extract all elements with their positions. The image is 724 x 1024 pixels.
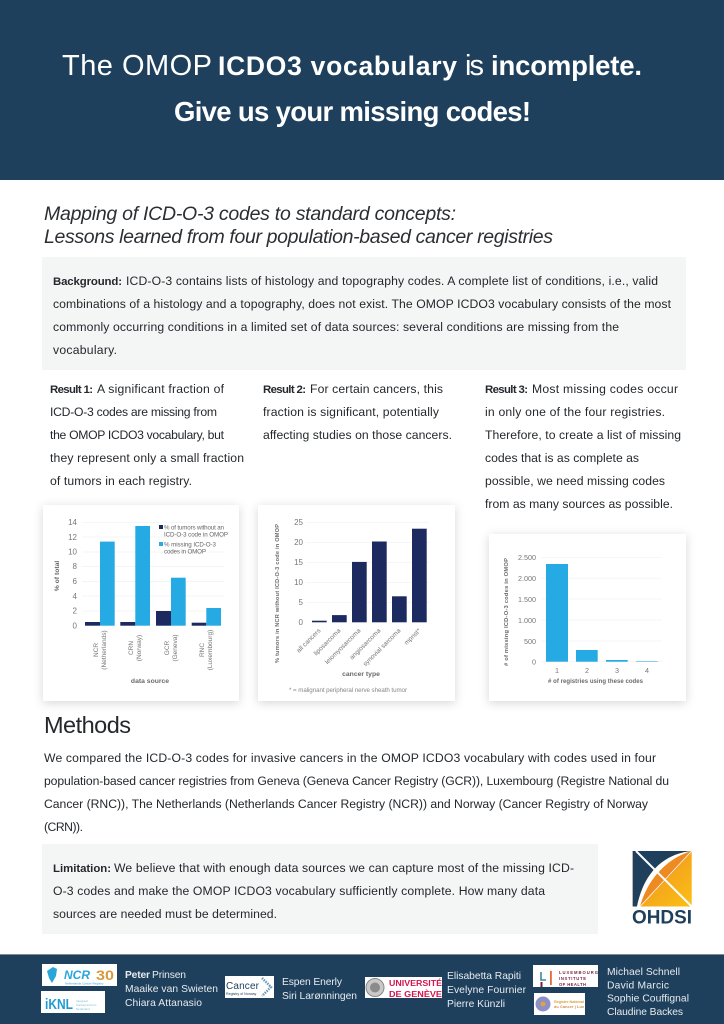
text: result 3 [485, 382, 681, 511]
chart: percentage by cancer type: liposarcoma [313, 627, 343, 657]
chart: percentage by cancer type [258, 505, 455, 701]
title: ICDO3 vocabulary [218, 51, 457, 81]
panel: background [42, 257, 686, 370]
chart: percentage by data source: (Norway) [136, 635, 143, 661]
text: result 2: For certain cancers, this [310, 382, 443, 396]
chart: missing codes by number of registries: 1 [555, 666, 559, 675]
logo: NCR: 30 [96, 967, 114, 983]
chart: percentage by cancer type: * = malignant peripheral nerve sheath tumor [289, 687, 407, 694]
logo: Registre National du Cancer: du Cancer | Lux [554, 1005, 585, 1009]
chart: missing codes by number of registries: 2.500 [518, 553, 536, 562]
logo: NCR: Netherlands Cancer Registry [65, 982, 104, 986]
text: result 2 [263, 382, 452, 442]
authors: RNC and LIH: Sophie Couffignal [607, 994, 689, 1004]
panel: limitation: sources are needed must be determined. [53, 907, 277, 921]
chart: percentage by data source: data source [131, 678, 169, 685]
chart: percentage by data source: 12 [68, 533, 78, 542]
text: result 1: of tumors in each registry. [50, 474, 192, 488]
chart: percentage by cancer type: cancer type [342, 671, 380, 678]
legend: % missing ICD-O-3 [164, 542, 217, 548]
title [62, 50, 642, 127]
logo: Cancer Registry of Norway: Registry of Norway [226, 992, 257, 996]
chart: percentage by cancer type: % tumors in NCR without ICD-O-3 code in OMOP [275, 524, 281, 663]
logo: KNL: Kankercentrum [76, 1003, 97, 1007]
authors: CRN: Siri Larønningen [282, 991, 357, 1002]
subtitle [44, 203, 553, 248]
chart: percentage by cancer type: 0 [299, 618, 304, 627]
panel: background: Background: [53, 276, 122, 288]
text: result 3: from as many sources as possible. [485, 497, 673, 511]
text: methods: We compared the ICD-O-3 codes for invasive cancers in the OMOP ICDO3 vocabulary with codes used in four [44, 751, 656, 765]
text: methods [44, 751, 669, 834]
authors: GCR: Evelyne Fournier [447, 985, 527, 996]
panel: background: commonly occurring conditions in a limited set of data sources: several conditions are missing from the [53, 320, 619, 334]
title: incomplete. [491, 50, 642, 81]
panel: background: vocabulary. [53, 343, 117, 357]
panel: limitation: Limitation: [53, 863, 111, 875]
chart: missing codes by number of registries: 2.000 [518, 574, 536, 583]
chart: percentage by data source: 0 [73, 622, 78, 630]
logo: Cancer Registry of Norway [225, 976, 274, 998]
logo: Université de Genève: DE GENÈVE [389, 989, 442, 999]
chart: percentage by data source: GCR [164, 640, 171, 655]
chart: percentage by cancer type: synovial sarcoma [362, 627, 403, 668]
chart: missing codes by number of registries: # of missing ICD-O-3 codes in OMOP [504, 558, 510, 666]
legend: codes in OMOP [164, 548, 206, 556]
text: result 1 [50, 382, 244, 488]
text: result 1: Result 1: [50, 384, 93, 396]
chart: missing codes by number of registries: 1.500 [518, 595, 536, 604]
chart: missing codes by number of registries: 0 [532, 658, 536, 666]
chart: percentage by cancer type: all cancers [295, 627, 323, 654]
panel: limitation: We believe that with enough data sources we can capture most of the missing ICD- [114, 861, 574, 875]
subtitle: Mapping of ICD-O-3 codes to standard concepts: [44, 203, 456, 225]
authors: RNC and LIH: Michael Schnell [607, 967, 680, 978]
chart: percentage by data source: % of total [54, 561, 61, 591]
chart: missing codes by number of registries: 3 [615, 666, 619, 675]
text: result 3: codes that is as complete as [485, 451, 639, 465]
logo: KNL [41, 991, 105, 1013]
text: result 2: Result 2: [263, 384, 306, 396]
chart: percentage by data source: (Geneva) [172, 634, 179, 662]
legend: ICD-O-3 code in OMOP [164, 532, 228, 538]
authors: CRN [282, 977, 357, 1002]
chart: percentage by data source: CRN [128, 641, 135, 655]
icon: OHDSI logo [632, 851, 692, 928]
logo: NCR [42, 964, 117, 986]
authors: NCR [125, 970, 218, 1009]
icon: OHDSI logo: OHDSI [632, 906, 692, 928]
text: result 3: in only one of the four registries. [485, 405, 665, 419]
text: methods: population-based cancer registries from Geneva (Geneva Cancer Registry (GCR)), Luxembourg (Registre National du [44, 774, 669, 788]
text: result 1: ICD-O-3 codes are missing from [50, 405, 217, 419]
authors: GCR: Elisabetta Rapiti [447, 971, 521, 982]
text: result 1: the OMOP ICDO3 vocabulary, but [50, 428, 225, 442]
chart: percentage by data source: 8 [73, 562, 78, 571]
authors: CRN: Espen Enerly [282, 977, 343, 988]
authors: NCR: Peter [125, 970, 150, 981]
authors: GCR [447, 971, 527, 1010]
chart: missing codes by number of registries: 1.000 [518, 616, 536, 625]
logo: Luxembourg Institute of Health [533, 965, 598, 987]
chart: percentage by cancer type: mpnst* [403, 627, 423, 647]
text: result 2: affecting studies on those cancers. [263, 428, 452, 442]
chart: percentage by data source: 14 [68, 518, 78, 527]
panel: background: ICD-O-3 contains lists of histology and topography codes. A complete list of conditions, i.e., valid [126, 274, 658, 288]
logo: Université de Genève [365, 977, 442, 999]
chart: missing codes by number of registries: 500 [524, 637, 536, 646]
footer [0, 954, 724, 1024]
chart: percentage by cancer type: 10 [294, 578, 304, 587]
chart: percentage by data source: RNC [199, 643, 206, 657]
logo: Université de Genève: UNIVERSITÉ [389, 978, 442, 988]
chart: percentage by cancer type: 5 [299, 598, 304, 607]
authors: RNC and LIH: Claudine Backes [607, 1007, 683, 1018]
chart: percentage by data source: 6 [73, 577, 78, 586]
logo: Cancer Registry of Norway: Cancer [226, 981, 260, 992]
authors: NCR: Maaike van Swieten [125, 984, 218, 995]
chart: percentage by cancer type: 25 [294, 518, 304, 527]
panel: limitation: O-3 codes and make the OMOP ICDO3 vocabulary sufficiently complete. How many data [53, 884, 545, 898]
text: result 1: they represent only a small fraction [50, 451, 244, 465]
logo: KNL: iKNL [45, 996, 73, 1013]
chart: percentage by data source: 4 [73, 592, 78, 601]
chart: percentage by data source: (Netherlands) [101, 630, 108, 670]
chart: percentage by data source [43, 505, 239, 701]
panel: limitation [42, 844, 598, 934]
logo: KNL: Nederland [76, 1007, 90, 1011]
text: result 2: fraction is significant, potentially [263, 405, 440, 419]
legend: % of tumors without an [164, 524, 225, 532]
chart: percentage by cancer type: 20 [294, 538, 304, 547]
title: Give us your missing codes! [174, 96, 531, 127]
chart: percentage by data source: 10 [68, 548, 78, 556]
title: is [465, 50, 484, 82]
authors: NCR: Chiara Attanasio [125, 998, 202, 1009]
text: result 3: Most missing codes occur [532, 382, 678, 396]
panel: background: combinations of a histology and a topography, does not exist. The OMOP ICDO3 vocabulary consists of the most [53, 297, 672, 311]
text: methods: (CRN)). [44, 820, 83, 834]
logo: Luxembourg Institute of Health: OF HEALTH [559, 982, 586, 987]
logo: NCR: NCR [64, 968, 90, 982]
chart: missing codes by number of registries: 4 [645, 666, 649, 675]
logo: Registre National du Cancer: Registre National [554, 1000, 584, 1004]
logo: Registre National du Cancer [534, 993, 585, 1015]
chart: missing codes by number of registries: 2 [585, 666, 589, 675]
chart: percentage by data source: (Luxembourg) [207, 630, 214, 670]
authors: RNC and LIH [607, 967, 689, 1018]
chart: percentage by cancer type: 15 [294, 558, 304, 567]
logo: Luxembourg Institute of Health: INSTITUTE [559, 976, 586, 981]
logo: Luxembourg Institute of Health: LUXEMBOURG [559, 970, 598, 975]
title: The OMOP [62, 50, 212, 82]
chart: percentage by data source: 2 [73, 606, 78, 616]
authors: GCR: Pierre Künzli [447, 999, 505, 1010]
header banner [0, 0, 724, 180]
chart: missing codes by number of registries [489, 534, 686, 701]
chart: missing codes by number of registries: # of registries using these codes [548, 679, 644, 685]
text: result 3: possible, we need missing codes [485, 474, 665, 488]
chart: percentage by data source: NCR [93, 643, 100, 657]
logo: KNL: Integraal [76, 999, 88, 1003]
chart: percentage by cancer type: leiomyosarcoma [324, 627, 363, 666]
chart: percentage by cancer type: angiosarcoma [349, 627, 383, 661]
authors: RNC and LIH: David Marcic [607, 980, 669, 992]
text: result 1: A significant fraction of [97, 382, 225, 396]
heading: methods: Methods [44, 712, 131, 738]
text: result 3: Therefore, to create a list of missing [485, 428, 681, 442]
text: methods: Cancer (RNC)), The Netherlands (Netherlands Cancer Registry (NCR)) and Norway (Cancer Registry of Norway [44, 797, 649, 811]
authors: NCR: Prinsen [152, 970, 186, 981]
subtitle: Lessons learned from four population-based cancer registries [44, 226, 553, 248]
text: result 3: Result 3: [485, 384, 528, 396]
legend [159, 524, 228, 556]
